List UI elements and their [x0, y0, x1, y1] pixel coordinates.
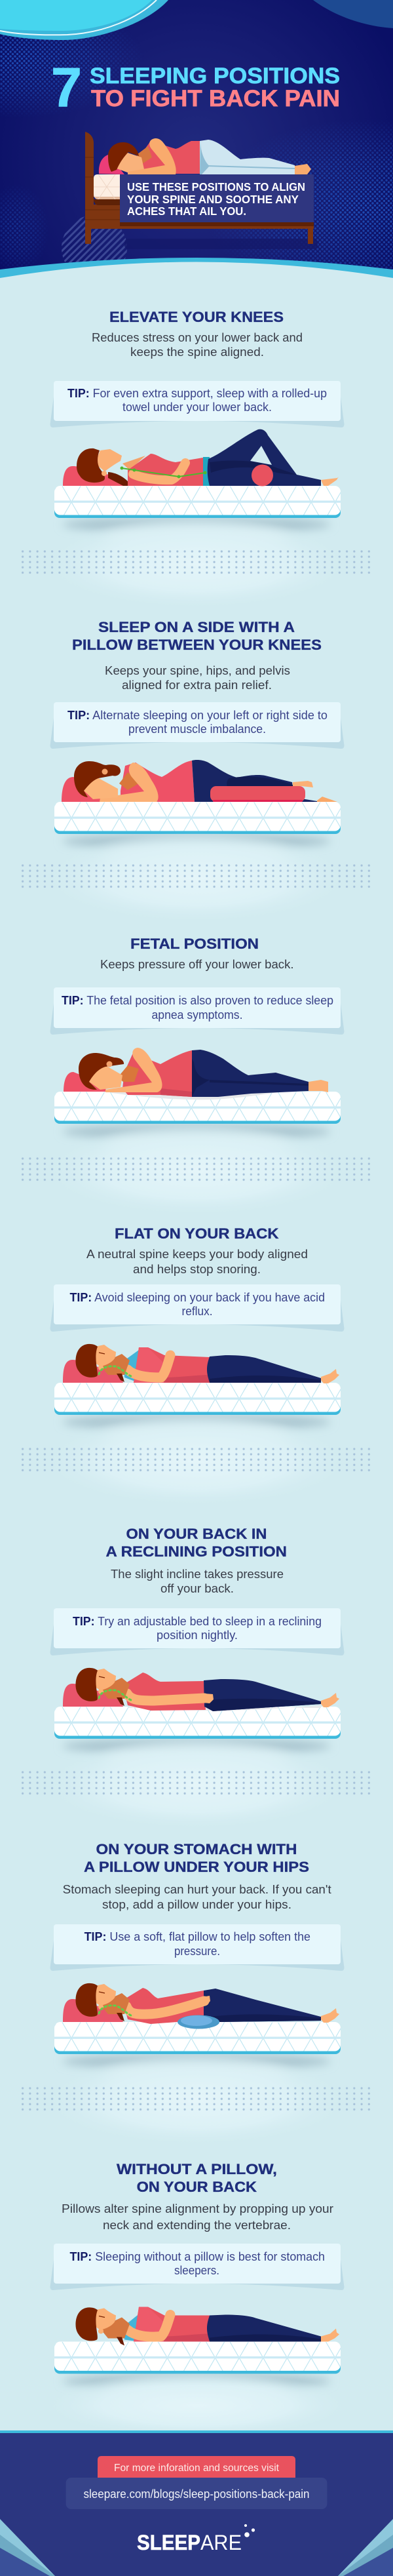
logo: ARE	[200, 2531, 242, 2554]
description: keeps the spine aligned.	[130, 345, 264, 359]
tip callout: reflux.	[182, 1305, 212, 1318]
tip callout: TIP: Use a soft, flat pillow to help soften the	[84, 1930, 310, 1943]
tip callout: TIP: The fetal position is also proven to reduce sleep	[62, 994, 333, 1007]
tip callout: TIP: Sleeping without a pillow is best for stomach	[69, 2250, 325, 2263]
heading: A RECLINING POSITION	[106, 1543, 287, 1560]
tip callout	[50, 1284, 345, 1332]
dotted separator 4	[19, 1416, 373, 1507]
description: aligned for extra pain relief.	[122, 678, 272, 692]
description: Reduces stress on your lower back and	[92, 330, 303, 344]
tip callout: TIP: Alternate sleeping on your left or right side to	[67, 709, 328, 722]
panel: stomach with pillow under hips	[50, 1841, 345, 2092]
panel: without a pillow	[50, 2161, 345, 2411]
heading: FLAT ON YOUR BACK	[115, 1225, 279, 1242]
sources banner: For more inforation and sources visit	[114, 2463, 280, 2474]
decorative hatched circle	[62, 215, 127, 281]
tip callout	[50, 1608, 345, 1655]
top-right blue circle	[313, 0, 393, 28]
heading: SLEEP ON A SIDE WITH A	[98, 619, 295, 635]
tip callout: sleepers.	[174, 2264, 219, 2277]
panel: flat on your back	[50, 1225, 345, 1453]
tip callout: pressure.	[174, 1945, 220, 1958]
logo	[137, 2524, 255, 2554]
illustration: woman flat on back	[54, 1344, 341, 1453]
heading: ON YOUR STOMACH WITH	[96, 1841, 297, 1857]
dotted separator 6	[19, 2055, 373, 2147]
intro text: ACHES THAT AIL YOU.	[127, 205, 246, 218]
sources banner	[98, 2456, 295, 2478]
tip callout: TIP: For even extra support, sleep with a rolled-up	[67, 387, 327, 400]
tip callout	[50, 1924, 345, 1971]
panel: reclining position	[50, 1526, 345, 1777]
blue hip pillow	[178, 2015, 219, 2029]
dotted separator 5	[19, 1739, 373, 1831]
description: Keeps your spine, hips, and pelvis	[105, 664, 290, 677]
heading: ELEVATE YOUR KNEES	[109, 309, 284, 325]
corner decoration left	[0, 2519, 55, 2576]
tip callout: TIP: Avoid sleeping on your back if you have acid	[69, 1291, 325, 1304]
panel: footer	[0, 2430, 393, 2576]
intro text: USE THESE POSITIONS TO ALIGN	[127, 180, 305, 193]
panel: side with pillow between knees	[50, 619, 345, 872]
description	[92, 330, 303, 359]
dotted separator 2	[19, 832, 373, 924]
heading	[117, 2161, 277, 2195]
description: A neutral spine keeps your body aligned	[86, 1247, 308, 1261]
heading: PILLOW BETWEEN YOUR KNEES	[72, 637, 322, 653]
panel: header banner	[0, 0, 393, 283]
intro text	[127, 180, 305, 218]
description: off your back.	[160, 1581, 234, 1595]
logo: SLEEP	[137, 2531, 200, 2554]
corner decoration right	[338, 2519, 393, 2576]
illustration: woman without a pillow	[54, 2307, 341, 2411]
illustration: woman with knees elevated	[54, 429, 341, 555]
tip callout	[50, 381, 345, 427]
text panel on bed	[120, 174, 314, 222]
tip callout: position nightly.	[157, 1629, 238, 1642]
description	[105, 664, 290, 692]
top-left cyan circle	[0, 0, 168, 40]
tip callout: apnea symptoms.	[152, 1008, 242, 1021]
title: SLEEPING POSITIONS	[90, 64, 340, 89]
title	[51, 56, 340, 118]
dotted separator 1	[19, 518, 373, 610]
description	[63, 1882, 331, 1911]
description: and helps stop snoring.	[133, 1262, 261, 1276]
tip callout: towel under your lower back.	[122, 401, 272, 414]
tip callout	[50, 2244, 345, 2290]
spine alignment line	[121, 467, 206, 478]
description: neck and extending the vertebrae.	[103, 2218, 291, 2232]
illustration: woman with pillow under hips	[54, 1983, 341, 2092]
tip callout: prevent muscle imbalance.	[128, 723, 266, 736]
intro text: YOUR SPINE AND SOOTHE ANY	[127, 193, 299, 206]
description: Pillows alter spine alignment by propping up your	[62, 2202, 333, 2215]
heading: FETAL POSITION	[130, 936, 259, 952]
heading: A PILLOW UNDER YOUR HIPS	[84, 1859, 309, 1875]
description	[62, 2202, 333, 2232]
illustration: woman on side with pillow	[54, 760, 341, 872]
panel: fetal position	[50, 936, 345, 1162]
dotted separator 3	[19, 1125, 373, 1217]
illustration: bed	[85, 132, 314, 244]
description: Keeps pressure off your lower back.	[100, 957, 294, 971]
heading	[72, 619, 322, 653]
description	[111, 1567, 284, 1595]
panel: elevate your knees	[50, 309, 345, 555]
curved divider	[0, 258, 393, 283]
tip callout: TIP: Try an adjustable bed to sleep in a reclining	[73, 1615, 322, 1628]
description: Stomach sleeping can hurt your back. If you can't	[63, 1882, 331, 1896]
description	[86, 1247, 308, 1276]
description: The slight incline takes pressure	[111, 1567, 284, 1581]
heading	[106, 1526, 287, 1560]
title: 7	[51, 56, 82, 118]
title: TO FIGHT BACK PAIN	[91, 86, 340, 111]
description: stop, add a pillow under your hips.	[102, 1897, 291, 1911]
heading: ON YOUR BACK IN	[126, 1526, 267, 1542]
heading: WITHOUT A PILLOW,	[117, 2161, 277, 2177]
illustration: woman reclining	[54, 1668, 341, 1777]
tip callout	[50, 987, 345, 1035]
heading	[84, 1841, 309, 1875]
illustration: woman in fetal position	[54, 1048, 341, 1162]
bed shadow	[124, 239, 318, 249]
tip callout	[50, 702, 345, 749]
heading: ON YOUR BACK	[137, 2179, 257, 2195]
source link: sleepare.com/blogs/sleep-positions-back-pain	[84, 2487, 309, 2501]
illustration: woman lying on her side	[99, 138, 311, 174]
source link	[66, 2478, 327, 2509]
bottom glow	[39, 2373, 354, 2438]
